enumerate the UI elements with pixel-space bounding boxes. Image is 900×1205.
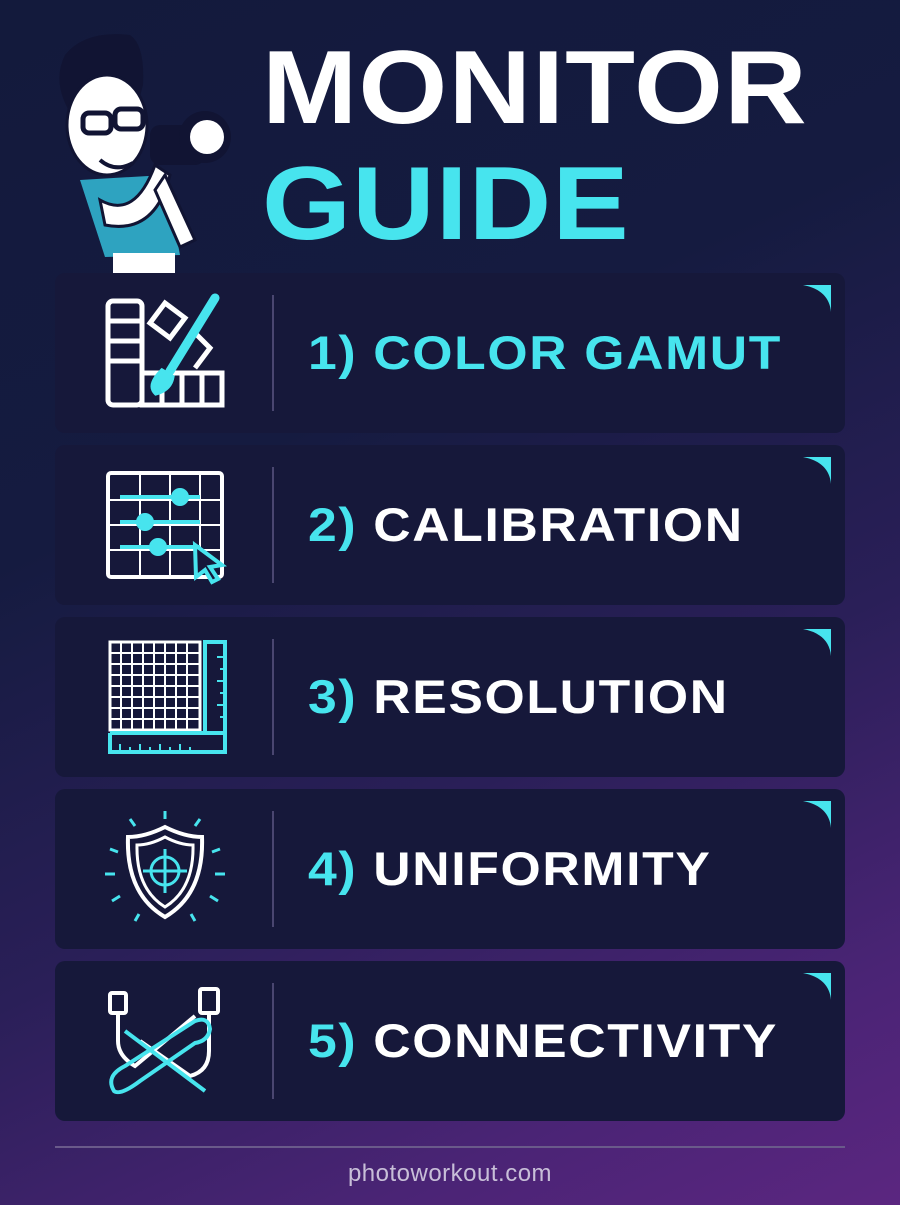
panel: color gamut <box>55 273 845 433</box>
icon: cables <box>108 987 220 1094</box>
corner accent <box>803 629 831 656</box>
label: 4) UNIFORMITY <box>308 842 711 895</box>
panel: uniformity <box>55 789 845 949</box>
corner accent <box>803 457 831 484</box>
panel: resolution <box>55 617 845 777</box>
label: 2) CALIBRATION <box>308 498 744 551</box>
icon: sliders <box>106 471 227 585</box>
title: MONITOR <box>262 30 808 146</box>
corner accent <box>803 973 831 1000</box>
corner accent <box>803 801 831 828</box>
icon: shield with target <box>105 811 225 922</box>
panel: connectivity <box>55 961 845 1121</box>
label: 5) CONNECTIVITY <box>308 1014 778 1067</box>
label: 1) COLOR GAMUT <box>308 326 782 379</box>
icon: grid with ruler <box>108 640 227 754</box>
panel: calibration <box>55 445 845 605</box>
icon: swatches and brush <box>106 294 224 408</box>
title <box>262 30 808 262</box>
label: 3) RESOLUTION <box>308 670 729 723</box>
title: GUIDE <box>262 146 630 262</box>
footer: photoworkout.com <box>348 1160 552 1187</box>
corner accent <box>803 285 831 312</box>
mascot: photographer <box>60 34 231 273</box>
